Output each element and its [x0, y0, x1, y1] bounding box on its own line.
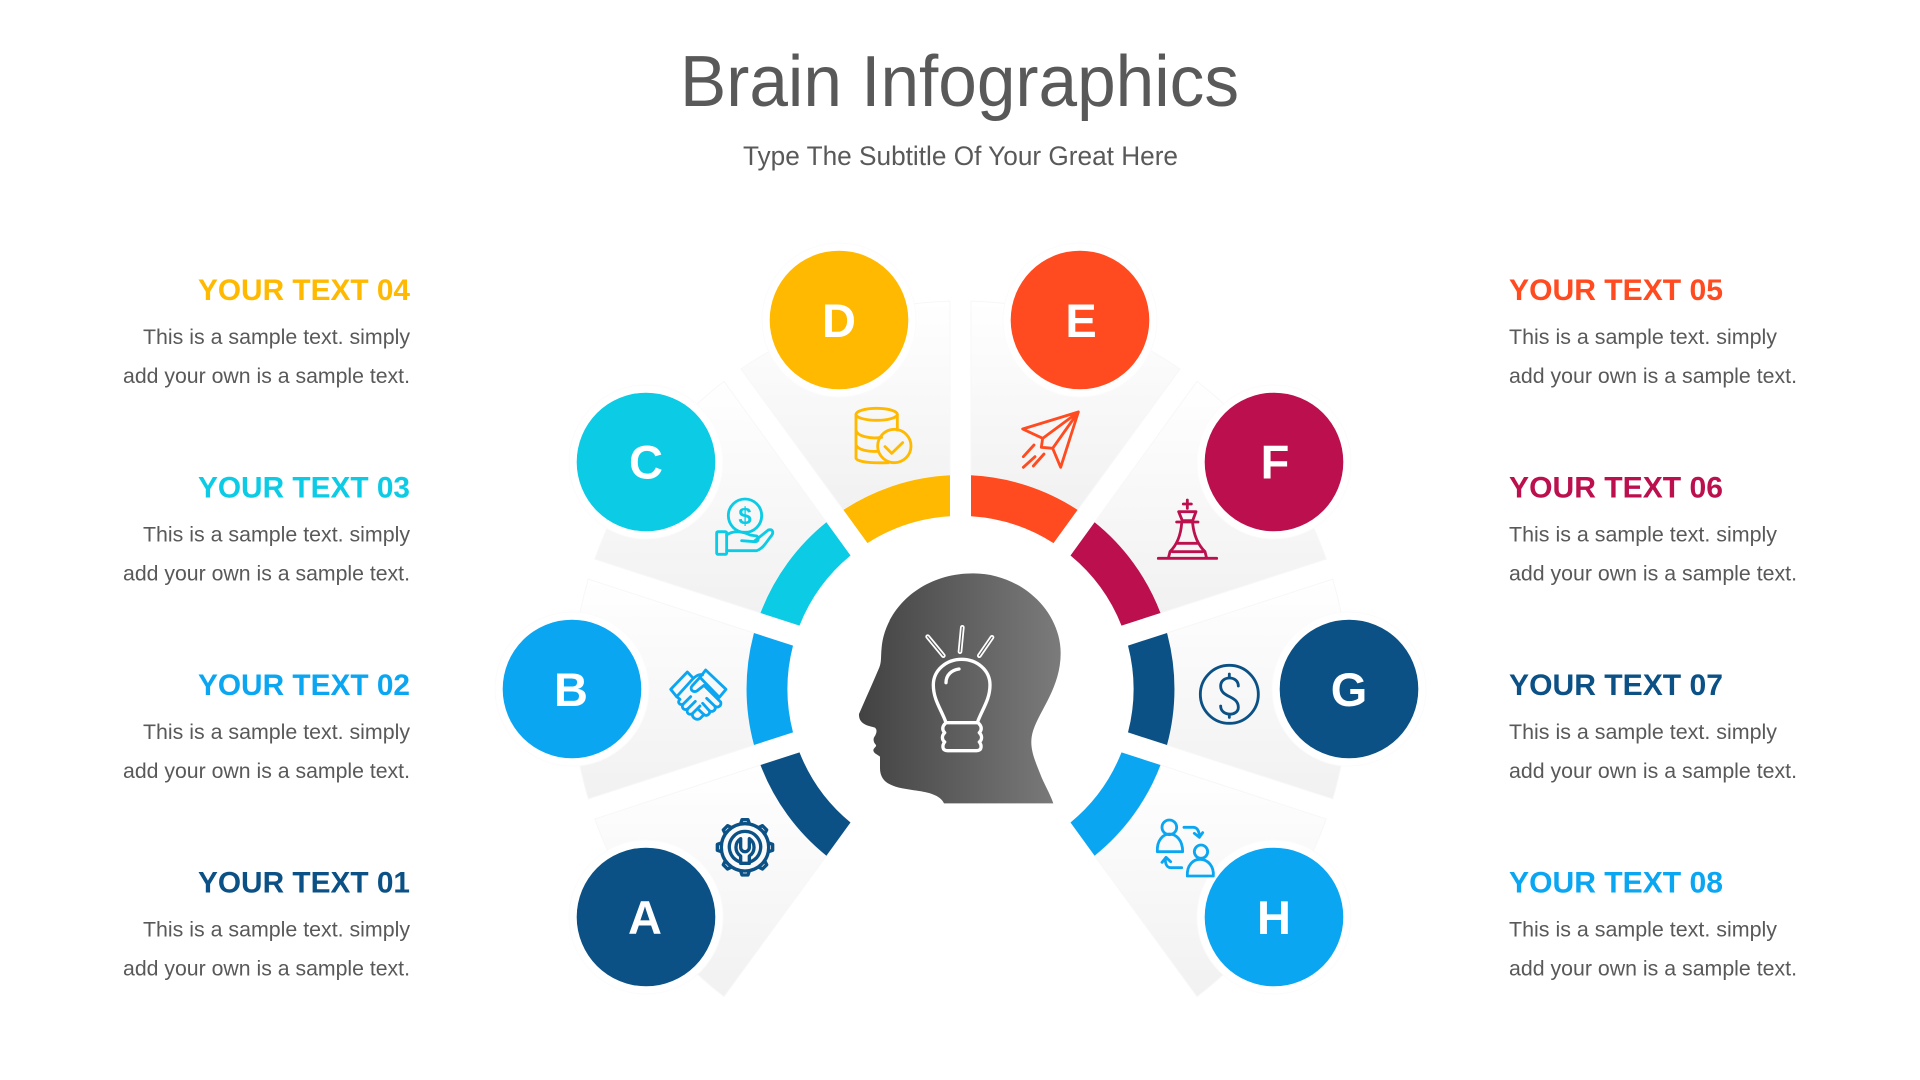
- badge B: B: [554, 663, 588, 716]
- ring arc H: [1070, 752, 1160, 856]
- text block 07: add your own is a sample text.: [1509, 760, 1797, 783]
- text block 04: This is a sample text. simply: [143, 326, 411, 349]
- text block 04: add your own is a sample text.: [123, 365, 410, 388]
- ring arc F: [1070, 522, 1160, 626]
- ring arc E: [971, 475, 1078, 543]
- badge F: F: [1261, 436, 1289, 488]
- text block 03: YOUR TEXT 03: [198, 472, 410, 504]
- ring arc B: [747, 633, 793, 745]
- icon: gear with wrench: [706, 808, 784, 886]
- text block 02: YOUR TEXT 02: [198, 669, 410, 702]
- head silhouette: [859, 573, 1061, 803]
- icon: handshake: [671, 670, 726, 719]
- central head with light bulb: [859, 573, 1061, 803]
- ring arc C: [760, 522, 850, 626]
- text block 06: YOUR TEXT 06: [1509, 472, 1723, 504]
- badge G: [1272, 612, 1426, 766]
- sector A: [595, 765, 826, 997]
- sector D: [741, 301, 950, 510]
- text block 06: add your own is a sample text.: [1509, 562, 1797, 586]
- text block 02: [123, 669, 411, 783]
- text block 08: This is a sample text. simply: [1509, 918, 1778, 941]
- panel: segment G: [1128, 579, 1426, 799]
- text block 07: [1509, 669, 1797, 783]
- panel: segment E: [971, 243, 1180, 543]
- badge A: A: [628, 891, 662, 944]
- badge C: C: [629, 436, 663, 488]
- badge E: [1003, 243, 1157, 397]
- text block 05: YOUR TEXT 05: [1509, 274, 1723, 307]
- text block 05: [1509, 274, 1797, 388]
- ring arc A: [760, 752, 850, 856]
- ring arc D: [843, 475, 950, 543]
- text block 03: [123, 472, 411, 586]
- badge F: [1197, 385, 1351, 539]
- sector F: [1095, 381, 1326, 613]
- icon: people exchange: [1157, 820, 1213, 876]
- badge H: H: [1257, 891, 1291, 944]
- text block 02: add your own is a sample text.: [123, 760, 410, 783]
- sector C: [595, 381, 826, 613]
- panel: segment B: [495, 579, 793, 799]
- panel: segment H: [1070, 752, 1351, 997]
- text block 05: This is a sample text. simply: [1509, 326, 1778, 349]
- text block 01: YOUR TEXT 01: [198, 866, 410, 900]
- sector E: [971, 301, 1180, 510]
- sector H: [1095, 765, 1326, 997]
- text block 05: add your own is a sample text.: [1509, 365, 1797, 388]
- subtitle: Type The Subtitle Of Your Great Here: [743, 141, 1178, 171]
- text block 03: This is a sample text. simply: [143, 524, 411, 546]
- text block 08: [1509, 866, 1797, 981]
- text block 07: This is a sample text. simply: [1509, 721, 1778, 744]
- text block 04: [123, 274, 411, 388]
- text block 08: YOUR TEXT 08: [1509, 866, 1723, 900]
- icon: paper plane: [1023, 412, 1078, 467]
- icon: chess king: [1158, 500, 1217, 558]
- title: Brain Infographics: [680, 42, 1239, 122]
- badge B: [495, 612, 649, 766]
- text block 03: add your own is a sample text.: [123, 562, 410, 586]
- badge D: D: [822, 294, 856, 347]
- ring arc G: [1128, 633, 1174, 745]
- icon: database check: [856, 408, 911, 463]
- text block 06: This is a sample text. simply: [1509, 524, 1778, 546]
- text block 01: [123, 866, 411, 981]
- panel: segment F: [1070, 381, 1351, 626]
- icon: coin in hand: $: [738, 503, 752, 530]
- text block 01: This is a sample text. simply: [143, 918, 411, 941]
- text block 08: add your own is a sample text.: [1509, 958, 1797, 981]
- sector B: [572, 579, 754, 799]
- badge H: [1197, 840, 1351, 994]
- panel: segment C: [569, 381, 850, 626]
- badge C: [569, 385, 723, 539]
- icon: coin in hand: [717, 499, 773, 554]
- text block 02: This is a sample text. simply: [143, 721, 411, 744]
- panel: segment D: [741, 243, 950, 543]
- text block 07: YOUR TEXT 07: [1509, 669, 1723, 702]
- badge A: [569, 840, 723, 994]
- icon: dollar coin: [1200, 665, 1258, 723]
- badge D: [762, 243, 916, 397]
- text block 04: YOUR TEXT 04: [198, 274, 410, 307]
- sector G: [1167, 579, 1349, 799]
- panel: segment A: [569, 752, 850, 997]
- text block 01: add your own is a sample text.: [123, 958, 410, 981]
- icon: light bulb: [928, 627, 992, 751]
- badge G: G: [1331, 663, 1367, 716]
- badge E: E: [1065, 294, 1097, 347]
- text block 06: [1509, 472, 1797, 586]
